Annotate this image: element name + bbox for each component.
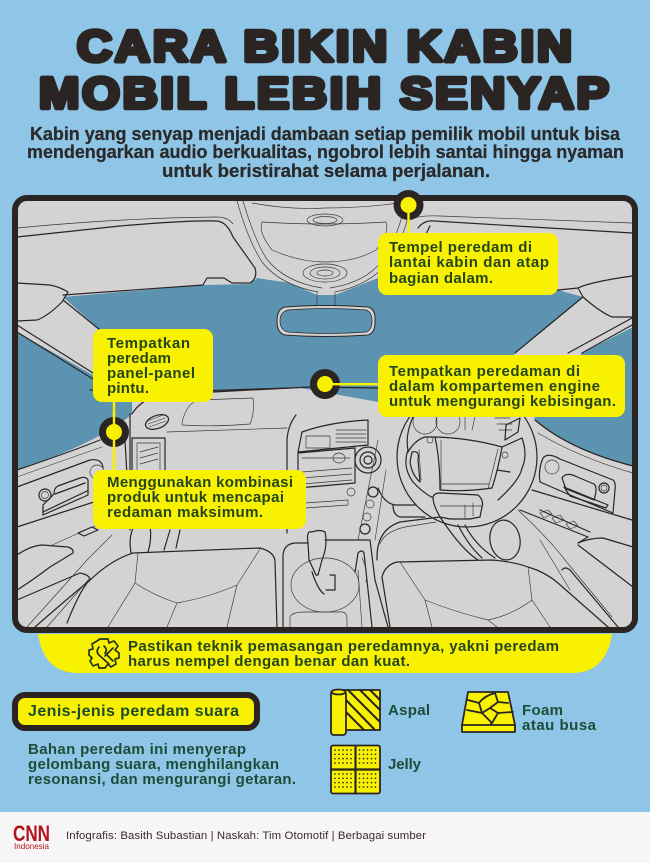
panel: car interior illustration (15, 198, 635, 630)
right door (518, 420, 633, 627)
right visor and pillar (400, 216, 632, 353)
intro text (27, 124, 624, 181)
heading: jenis-jenis peredam suara (15, 695, 257, 728)
overhead console (237, 201, 412, 306)
callout: panel pintu: panel-panel (107, 365, 195, 382)
intro text: untuk beristirahat selama perjalanan. (162, 161, 490, 181)
title: MOBIL LEBIH SENYAP (39, 68, 609, 118)
callout: kombinasi produk: redaman maksimum. (107, 504, 263, 521)
icon: foam (462, 692, 515, 732)
icon: jelly (331, 746, 380, 794)
intro text: Kabin yang senyap menjadi dambaan setiap pemilik mobil untuk bisa (30, 124, 621, 144)
logo: CNN Indonesia (13, 821, 50, 851)
callout: panel pintu: peredam (107, 350, 171, 367)
description text: resonansi, dan mengurangi getaran. (28, 771, 296, 788)
description text: gelombang suara, menghilangkan (28, 756, 279, 773)
heading: jenis-jenis peredam suara: Jenis-jenis peredam suara (28, 703, 239, 720)
credits: Infografis: Basith Subastian | Naskah: Tim Otomotif | Berbagai sumber (66, 830, 426, 842)
callout marker: left (99, 400, 129, 472)
callout: kompartemen engine (378, 355, 625, 417)
rear view mirror (277, 306, 375, 336)
title: CARA BIKIN KABIN (77, 21, 572, 71)
left door (17, 440, 112, 627)
callout: kombinasi produk: produk untuk mencapai (107, 489, 284, 506)
tip band: harus nempel dengan benar dan kuat. (128, 653, 410, 670)
callout: lantai kabin: Tempel peredam di (389, 239, 532, 256)
callout: kombinasi produk: Menggunakan kombinasi (107, 474, 293, 491)
panel frame (15, 198, 635, 630)
callout: kombinasi produk (93, 470, 306, 529)
tip band: Pastikan teknik pemasangan peredamnya, yakni peredam (128, 638, 559, 655)
label: jelly: Jelly (388, 756, 422, 773)
callout marker: top (394, 190, 424, 235)
windows (17, 278, 633, 470)
label: foam: Foam (522, 702, 563, 719)
footer (0, 812, 650, 863)
tip band (38, 634, 612, 673)
description text: Bahan peredam ini menyerap (28, 741, 246, 758)
left visor and pillar (17, 217, 256, 379)
logo: CNN Indonesia: Indonesia (14, 841, 49, 851)
intro text: mendengarkan audio berkualitas, ngobrol lebih santai hingga nyaman (27, 142, 624, 162)
left seat (67, 525, 277, 627)
icon: gear and wrench (89, 639, 119, 668)
centre console (283, 420, 388, 627)
label: foam: atau busa (522, 717, 597, 734)
callout: lantai kabin (378, 233, 558, 295)
logo: CNN Indonesia: CNN (13, 821, 50, 846)
callout: panel pintu (93, 329, 213, 402)
under steering wheel (377, 487, 426, 518)
right seat and footwell (377, 517, 608, 627)
callout: kompartemen engine: dalam kompartemen engine (389, 378, 600, 395)
icon: aspal (331, 690, 380, 735)
label: foam (522, 702, 597, 734)
callout: panel pintu: pintu. (107, 380, 149, 397)
dashboard (89, 386, 378, 534)
description text (28, 741, 296, 788)
callout marker: middle (310, 369, 380, 399)
title (39, 21, 609, 118)
callout: kompartemen engine: untuk mengurangi kebisingan. (389, 393, 616, 410)
label: aspal: Aspal (388, 702, 430, 719)
callout: lantai kabin: lantai kabin dan atap (389, 254, 549, 271)
line art (17, 201, 633, 627)
callout: panel pintu: Tempatkan (107, 335, 190, 352)
callout: lantai kabin: bagian dalam. (389, 270, 493, 287)
callout: kompartemen engine: Tempatkan peredaman di (389, 363, 580, 380)
steering wheel (396, 417, 538, 528)
